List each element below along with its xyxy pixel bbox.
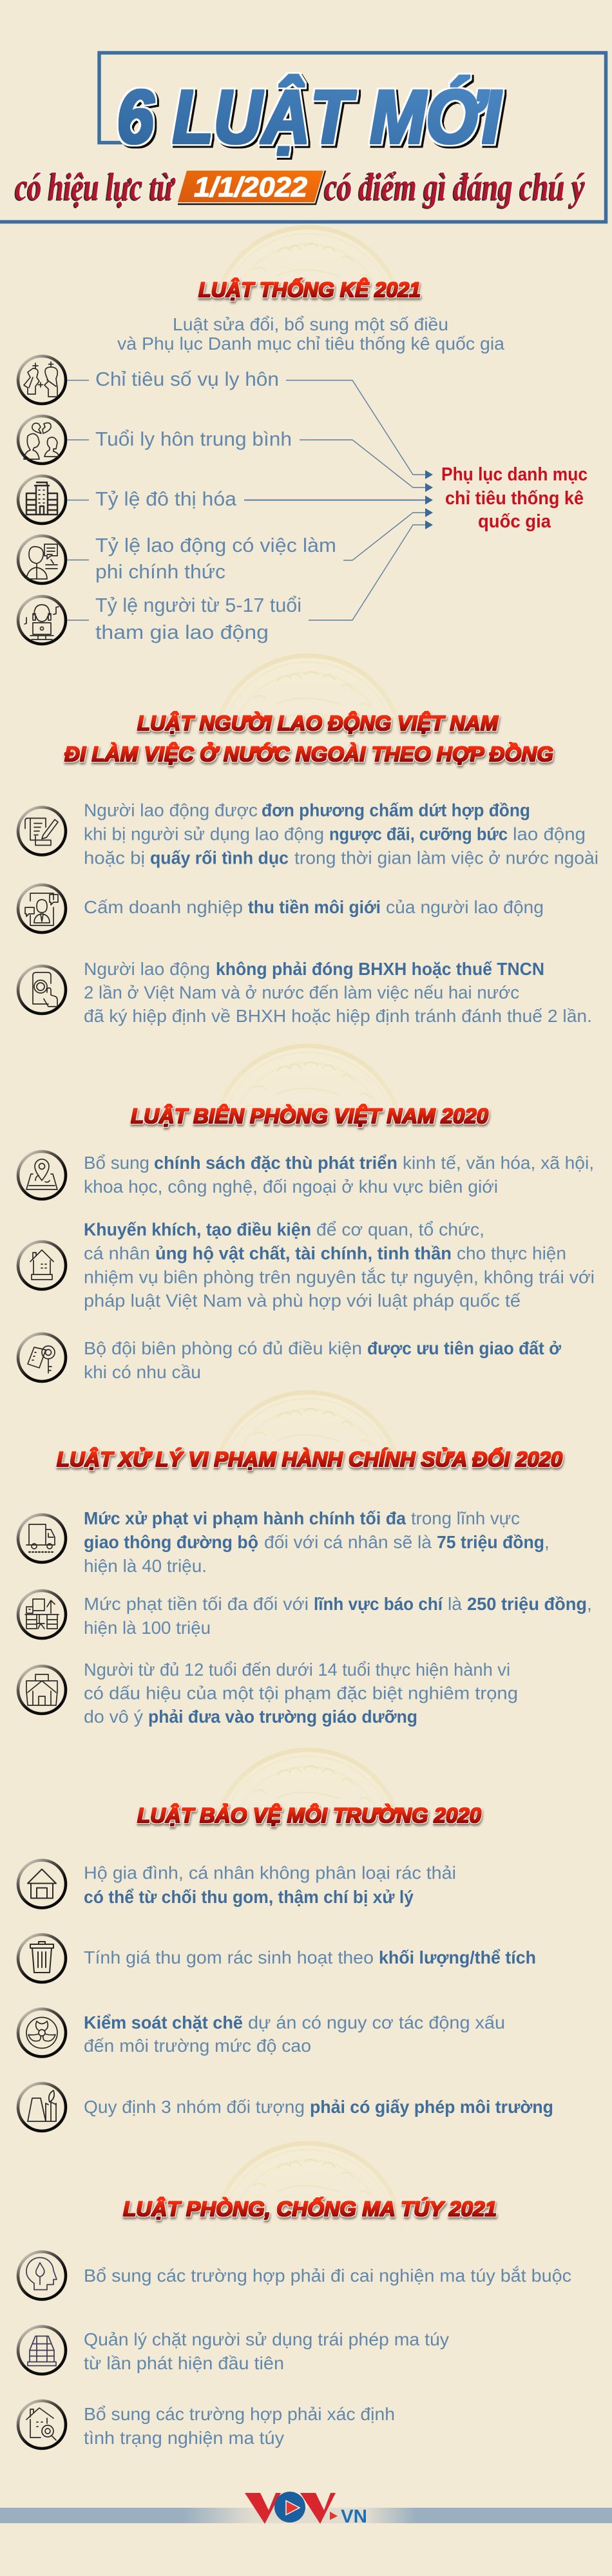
text block: không phải đóng BHXH hoặc thuế TNCN [216,959,544,979]
heading: LUẬT BẢO VỆ MÔI TRƯỜNG 2020 [137,1804,481,1827]
item: Tuổi ly hôn trung bình [18,416,292,464]
text block [84,2329,449,2373]
logo: VOV.VN: VN [341,2506,367,2527]
text block: ngược đãi, cưỡng bức [329,824,508,844]
text block: khi có nhu cầu [84,1362,201,1382]
icon: factory with leaf [18,2083,66,2131]
text block [84,959,592,1026]
text block: hiện là 100 triệu [84,1618,211,1638]
text block: Bổ sung [84,1153,149,1173]
text block: được ưu tiên giao đất ở [367,1338,561,1358]
text block [84,2012,505,2056]
text block: giao thông đường bộ [84,1532,258,1552]
subtitle left: có hiệu lực từ [15,166,176,208]
text block [84,1220,595,1311]
text block: 250 triệu đồng [467,1594,587,1614]
text block: Tính giá thu gom rác sinh hoạt theo [84,1947,374,1967]
text block: đơn phương chấm dứt hợp đồng [262,800,530,820]
item: Tỷ lệ người từ 5-17 tuổi tham gia lao động [18,594,301,644]
title block [0,53,606,222]
text block: dự án có nguy cơ tác động xấu [248,2012,505,2032]
panel: Luật Biên phòng Việt Nam 2020 [18,1104,595,1382]
label [95,534,336,583]
item: Chỉ tiêu số vụ ly hôn [18,356,279,404]
text block: hiện là 40 triệu. [84,1556,207,1576]
connector tick [67,559,89,560]
arrows to annex [244,380,433,620]
text block: khoa học, công nghệ, đối ngoại ở khu vực biên giới [84,1177,498,1197]
text block: lao động [513,824,586,844]
text block: hoặc bị [84,848,145,868]
panel: Luật Người lao động Việt Nam đi làm việc ở nước ngoài [18,712,598,1026]
text block: quấy rối tình dục [150,848,289,868]
label: Chỉ tiêu số vụ ly hôn [95,368,279,390]
text block: Người từ đủ 12 tuổi đến dưới 14 tuổi thực hiện hành vi [84,1660,510,1680]
text block: 75 triệu đồng [437,1532,544,1552]
date badge [178,171,325,204]
text block: cá nhân [84,1243,150,1264]
text block: cho thực hiện [457,1243,566,1264]
panel: Luật Xử lý vi phạm hành chính sửa đổi 2020 [18,1448,592,1727]
text block: đối với cá nhân sẽ là [264,1532,432,1552]
text block: , [587,1594,592,1614]
text block: khối lượng/thể tích [379,1947,536,1967]
text block: phải đưa vào trường giáo dưỡng [148,1707,417,1727]
connector tick [67,620,89,621]
text block: Người lao động được [84,800,258,820]
intro text: và Phụ lục Danh mục chỉ tiêu thống kê quốc gia [117,334,504,354]
text block: Người lao động [84,959,210,979]
icon: land key [18,1334,66,1381]
connector tick [67,380,89,381]
icon: house outline [18,1860,66,1908]
text block: 2 lần ở Việt Nam và ở nước đến làm việc nếu hai nước [84,983,519,1002]
text block: là [448,1594,462,1614]
icon: tablet with person [18,885,66,933]
connector tick [67,500,89,501]
text block: có dấu hiệu của một tội phạm đặc biệt nghiêm trọng [84,1683,518,1703]
text block: Bộ đội biên phòng có đủ điều kiện [84,1338,362,1358]
icon: city buildings [18,476,66,524]
icon: map pin [18,1151,66,1199]
intro text [117,314,504,354]
text block [84,1594,592,1638]
text block: nhiệm vụ biên phòng trên nguyên tắc tự nguyện, không trái với [84,1267,595,1287]
panel: Luật Bảo vệ môi trường 2020 [18,1804,553,2131]
text block [84,1660,518,1727]
annex label: chỉ tiêu thống kê [445,488,584,509]
item: Tỷ lệ lao động có việc làm phi chính thức [18,534,336,583]
annex label: Phụ lục danh mục [441,464,588,485]
text block: tình trạng nghiện ma túy [84,2428,284,2448]
icon: child at laptop [18,596,66,644]
icon: arguing couple [18,356,66,404]
label: Tuổi ly hôn trung bình [95,428,292,450]
label: Tỷ lệ lao động có việc làm [95,534,336,556]
icon: biohazard [18,2009,66,2057]
label: Tỷ lệ đô thị hóa [95,488,237,510]
label [95,594,301,643]
panel: Luật Phòng, chống ma túy 2021 [18,2197,571,2448]
text block: trong thời gian làm việc ở nước ngoài [294,848,598,868]
heading: LUẬT PHÒNG, CHỐNG MA TÚY 2021 [123,2197,497,2221]
text block: để cơ quan, tổ chức, [316,1220,484,1239]
heading [64,712,553,766]
icon: broken heart couple [18,416,66,464]
text block: do vô ý [84,1707,143,1727]
heading: ĐI LÀM VIỆC Ở NƯỚC NGOÀI THEO HỢP ĐỒNG [64,743,553,766]
text block: Quy định 3 nhóm đối tượng [84,2097,305,2117]
icon: truck [18,1515,66,1562]
text block: Cấm doanh nghiệp [84,897,243,917]
text block: Kiểm soát chặt chẽ [84,2012,243,2032]
item: Tỷ lệ đô thị hóa [18,476,237,524]
text block: đã ký hiệp định về BHXH hoặc hiệp định tránh đánh thuế 2 lần. [84,1006,592,1026]
text block: Mức phạt tiền tối đa đối với [84,1594,309,1614]
icon: school bag [18,1666,66,1714]
icon: house with magnifier [18,2401,66,2448]
heading: LUẬT NGƯỜI LAO ĐỘNG VIỆT NAM [137,712,499,735]
logo: VOV.VN [245,2492,367,2527]
text block: Bổ sung các trường hợp phải xác định [84,2404,395,2424]
watermark: national emblems [211,225,405,2334]
text block [84,2097,553,2117]
text block: lĩnh vực báo chí [314,1594,443,1614]
icon: house [18,1242,66,1289]
date badge: 1/1/2022 [194,172,307,203]
footer band [0,2508,612,2523]
text block: chính sách đặc thù phát triển [154,1153,397,1173]
text block: Mức xử phạt vi phạm hành chính tối đa [84,1508,406,1528]
heading: LUẬT XỬ LÝ VI PHẠM HÀNH CHÍNH SỬA ĐỔI 2020 [57,1448,562,1471]
icon: press office [18,1591,66,1638]
main title: 6 LUẬT MỚI [117,74,502,160]
text block: kinh tế, văn hóa, xã hội, [403,1153,594,1173]
text block: đến môi trường mức độ cao [84,2036,311,2056]
heading: LUẬT BIÊN PHÒNG VIỆT NAM 2020 [131,1104,488,1128]
label: Tỷ lệ người từ 5-17 tuổi [95,594,301,616]
text block: có thể từ chối thu gom, thậm chí bị xử lý [84,1887,414,1907]
text block [84,897,544,917]
text block: trong lĩnh vực [411,1508,520,1528]
text block: Hộ gia đình, cá nhân không phân loại rác thải [84,1862,456,1883]
icon: window building [18,2326,66,2374]
icon: trash bin [18,1935,66,1982]
text block: Quản lý chặt người sử dụng trái phép ma túy [84,2329,449,2349]
text block: khi bị người sử dụng lao động [84,824,324,844]
text block: thu tiền môi giới [248,897,381,917]
icon: head with tree [18,2251,66,2299]
intro text: Luật sửa đổi, bổ sung một số điều [173,314,448,334]
heading: LUẬT THỐNG KÊ 2021 [198,278,421,301]
text block [84,2404,395,2448]
text block: ủng hộ vật chất, tài chính, tinh thần [155,1243,452,1264]
text block: Khuyến khích, tạo điều kiện [84,1220,311,1239]
text block [84,800,598,868]
text block: , [544,1532,550,1552]
icon: contract and pen [18,808,66,855]
text block: của người lao động [386,897,544,917]
icon: phone with money [18,966,66,1014]
connector tick [67,439,89,440]
label: tham gia lao động [95,621,269,643]
text block [84,1947,536,1967]
text block [84,1862,456,1907]
text block: pháp luật Việt Nam và phù hợp với luật pháp quốc tế [84,1291,521,1311]
panel: Luật Thống kê 2021 [18,278,588,644]
text block [84,1153,594,1197]
text block [84,1338,561,1382]
label: phi chính thức [95,560,225,583]
text block: Bổ sung các trường hợp phải đi cai nghiện ma túy bắt buộc [84,2266,571,2286]
title frame [0,53,606,222]
text block [84,1508,550,1576]
text block: từ lần phát hiện đầu tiên [84,2353,284,2373]
annex label: quốc gia [478,511,551,532]
text block: phải có giấy phép môi trường [310,2097,553,2117]
annex label [441,464,588,532]
icon: worker with speech bubble [18,536,66,583]
